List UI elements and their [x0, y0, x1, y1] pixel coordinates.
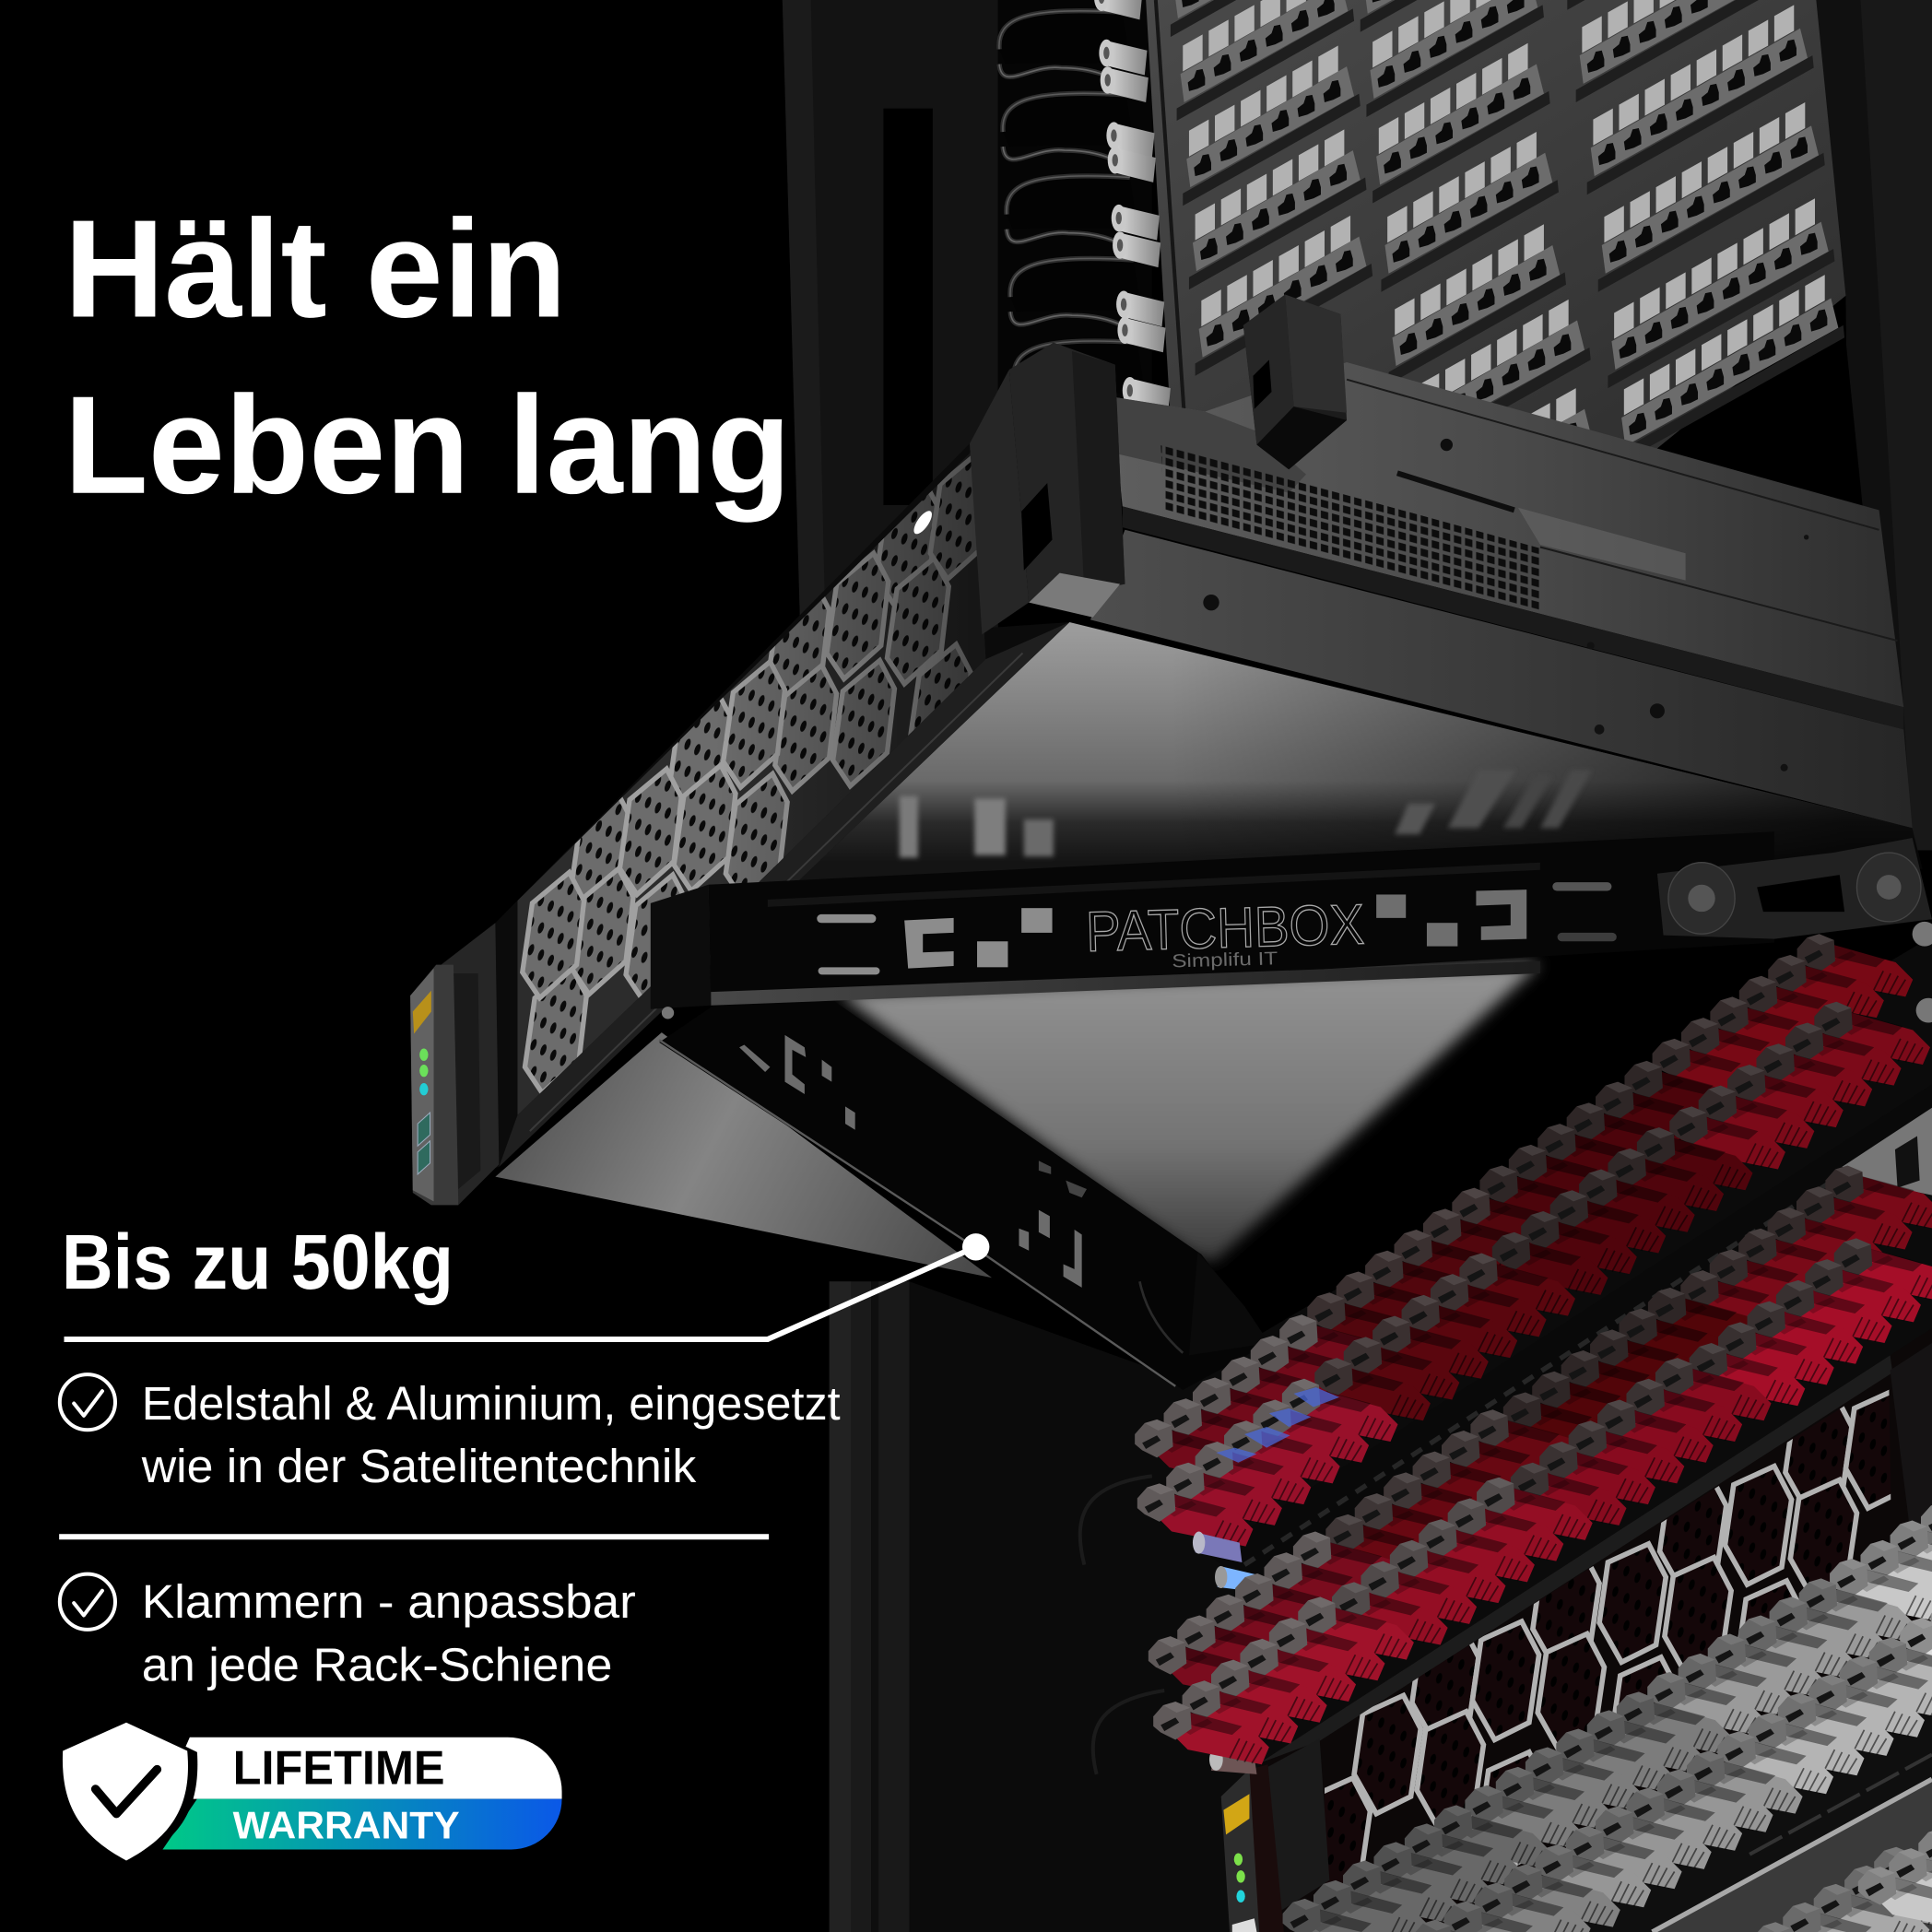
- red patch cables lower band: [1149, 1166, 1932, 1764]
- yellow label: [1223, 1794, 1249, 1834]
- upper server front with hexagon grille: [487, 443, 1069, 1171]
- drawer slide rail: [659, 1000, 1269, 1390]
- USB ports: [418, 1113, 430, 1174]
- title: [65, 192, 791, 524]
- feature 2: [60, 1574, 636, 1690]
- server ear with status LEDs: [410, 923, 499, 1205]
- vertical cable tie line: [1156, 0, 1184, 413]
- rail cutouts: [817, 908, 1053, 974]
- feature 1 text: wie in der Satelitentechnik: [141, 1440, 697, 1492]
- PATCHBOX mounting rail: [651, 831, 1932, 1019]
- top-right glands: [1913, 922, 1932, 1022]
- feature 1: [60, 1374, 841, 1492]
- faint cables: [1080, 1476, 1164, 1774]
- feature 1 text: Edelstahl & Aluminium, eingesetzt: [142, 1377, 841, 1430]
- feature 1 text: [141, 1377, 841, 1492]
- cable glands: [1094, 0, 1171, 413]
- rear rack frame: [783, 0, 1932, 1932]
- reflected rail slots: [900, 770, 1592, 857]
- patch panel wall: [1146, 0, 1848, 548]
- title: Leben lang: [65, 368, 791, 524]
- white patch cables: [1283, 1465, 1932, 1932]
- slide rail cutouts: [739, 1035, 1087, 1288]
- title: Hält ein: [65, 192, 567, 348]
- hinge: [651, 885, 711, 1009]
- lit underside left: [495, 1032, 992, 1278]
- blue light reflections: [1216, 1387, 1339, 1463]
- server back plate: [1090, 362, 1913, 828]
- heading: load capacity: Bis zu 50kg: [62, 1219, 454, 1305]
- lifetime warranty badge: WARRANTY: [233, 1803, 460, 1846]
- lit underside below rail: [838, 963, 1540, 1262]
- icon: check circle: [60, 1574, 115, 1630]
- lit server underside: [789, 622, 1922, 887]
- lifetime warranty badge: LIFETIME: [233, 1742, 445, 1796]
- yellow label: [413, 991, 431, 1034]
- small clip bracket: [1243, 294, 1347, 469]
- blue-lit glands: [1193, 1532, 1256, 1774]
- cable loops: [999, 11, 1145, 422]
- status LEDs: [1234, 1853, 1245, 1903]
- logo: Simplifu IT: [1172, 948, 1278, 972]
- icon: check circle: [60, 1374, 115, 1430]
- feature 2 text: [142, 1575, 636, 1690]
- lower server hexagon panel: [1221, 1328, 1932, 1932]
- LEDs: [419, 1049, 429, 1095]
- icon: shield with check: [55, 1717, 197, 1866]
- patch panel modules: [1171, 0, 1844, 548]
- feature 2 text: Klammern - anpassbar: [142, 1575, 636, 1628]
- logo: PATCHBOX: [1085, 893, 1365, 964]
- rail end plate: [1657, 838, 1932, 939]
- callout leader line: [65, 1233, 989, 1339]
- hexagon grille: [518, 454, 986, 1115]
- lower right black rail and panel: [1515, 1651, 1932, 1932]
- red patch cables upper band: [1135, 934, 1930, 1547]
- lifetime warranty badge: [55, 1717, 562, 1866]
- feature 2 text: an jede Rack-Schiene: [142, 1638, 612, 1690]
- large side bracket: [970, 343, 1125, 634]
- lower cable rail and panel: [1208, 1084, 1932, 1589]
- divider: [59, 1534, 769, 1539]
